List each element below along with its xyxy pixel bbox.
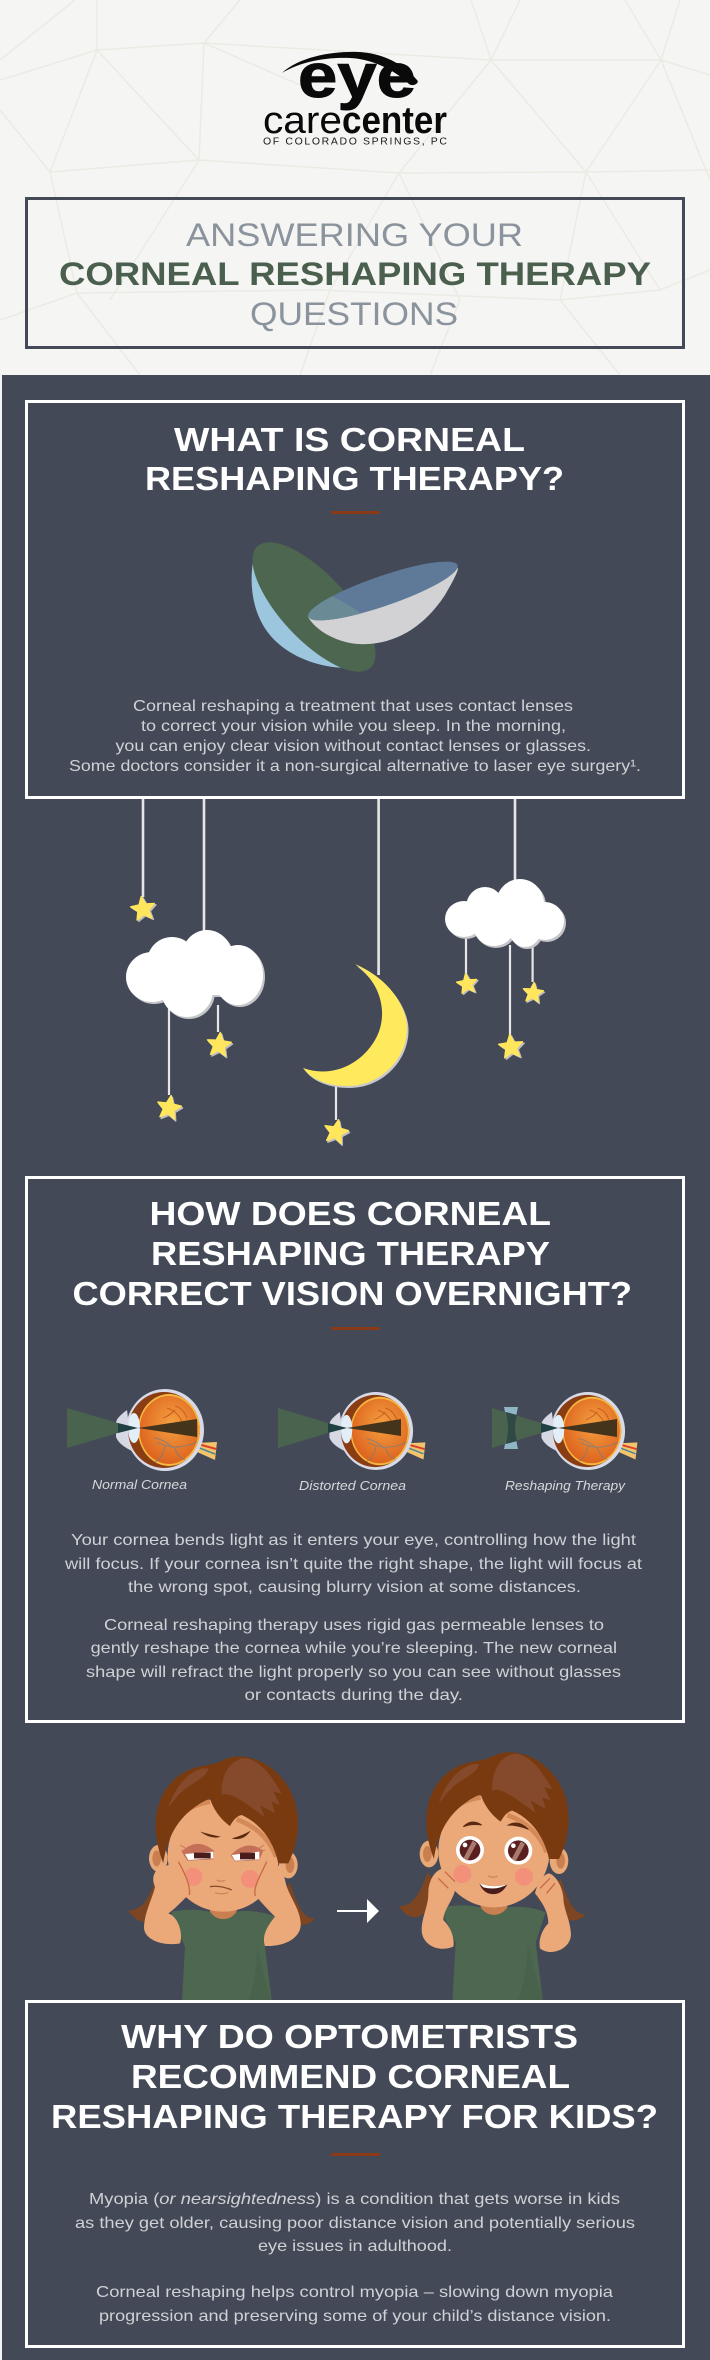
body text: progression and preserving some of your child’s distance vision. <box>99 2308 611 2325</box>
caption: Reshaping Therapy <box>505 1478 627 1493</box>
body text: the wrong spot, causing blurry vision at some distances. <box>128 1579 581 1596</box>
body text: Corneal reshaping a treatment that uses contact lenses <box>133 698 573 715</box>
star <box>522 981 545 1004</box>
body text: to correct your vision while you sleep. In the morning, <box>141 718 566 735</box>
body text <box>75 2191 635 2325</box>
heading: RECOMMEND CORNEAL <box>131 2058 570 2095</box>
body text: Corneal reshaping therapy uses rigid gas permeable lenses to <box>104 1617 604 1634</box>
body text: Corneal reshaping helps control myopia – slowing down myopia <box>96 2284 613 2301</box>
body text: or contacts during the day. <box>244 1687 463 1704</box>
panel: why do optometrists recommend corneal reshaping therapy for kids <box>26 2002 684 2346</box>
body text: will focus. If your cornea isn’t quite the right shape, the light will focus at <box>64 1556 643 1573</box>
panel: what is corneal reshaping therapy <box>26 402 684 798</box>
heading <box>145 421 564 497</box>
heading <box>72 1195 632 1312</box>
caption: Normal Cornea <box>92 1477 187 1492</box>
star <box>129 895 158 922</box>
body text: gently reshape the cornea while you’re sleeping. The new corneal <box>91 1640 617 1657</box>
heading: RESHAPING THERAPY <box>151 1235 550 1272</box>
title line: Corneal Reshaping Therapy: CORNEAL RESHAPING THERAPY <box>59 256 651 292</box>
moon <box>303 964 409 1088</box>
body text: shape will refract the light properly so you can see without glasses <box>86 1664 621 1681</box>
arrow <box>337 1899 379 1923</box>
logo: Eye Care Center: eye <box>298 42 416 111</box>
title panel <box>26 198 684 348</box>
logo: Eye Care Center: center <box>342 100 447 142</box>
star <box>155 1094 184 1122</box>
title line: Questions: QUESTIONS <box>250 296 458 332</box>
diagram: reshaping therapy eye with lens <box>492 1392 637 1470</box>
panel: how does corneal reshaping therapy correct vision overnight <box>26 1178 684 1722</box>
heading: WHAT IS CORNEAL <box>174 421 525 458</box>
body text: Myopia ( or nearsightedness ) is a condition that gets worse in kids <box>89 2191 620 2208</box>
heading: RESHAPING THERAPY FOR KIDS? <box>51 2098 658 2135</box>
body text: as they get older, causing poor distance vision and potentially serious <box>75 2215 635 2232</box>
body text: Some doctors consider it a non-surgical alternative to laser eye surgery¹. <box>69 758 641 775</box>
diagram: normal cornea eye <box>67 1389 217 1471</box>
body text: you can enjoy clear vision without contact lenses or glasses. <box>116 738 591 755</box>
icon: contact lenses <box>252 542 458 672</box>
star <box>456 972 480 995</box>
illustration: squinting child <box>128 1757 315 2007</box>
diagram: distorted cornea eye <box>278 1392 425 1470</box>
title line: Answering your: ANSWERING YOUR <box>186 217 523 253</box>
logo: Eye Care Center: care <box>263 100 342 142</box>
hanging night-sky mobile <box>126 799 566 1146</box>
star <box>498 1033 526 1060</box>
logo: Eye Care Center <box>263 42 447 148</box>
cloud: left <box>126 930 265 1019</box>
heading: WHY DO OPTOMETRISTS <box>121 2018 578 2055</box>
star <box>322 1117 352 1146</box>
illustration: happy child <box>399 1752 586 2002</box>
heading: HOW DOES CORNEAL <box>150 1195 551 1232</box>
caption: Distorted Cornea <box>299 1478 406 1493</box>
cloud: right <box>445 879 566 949</box>
body text <box>64 1532 643 1704</box>
heading: RESHAPING THERAPY? <box>145 460 564 497</box>
body text: eye issues in adulthood. <box>258 2238 452 2255</box>
body text <box>69 698 641 775</box>
body text: Your cornea bends light as it enters your eye, controlling how the light <box>71 1532 637 1549</box>
heading: CORRECT VISION OVERNIGHT? <box>72 1275 632 1312</box>
heading <box>51 2018 658 2135</box>
logo: Eye Care Center: OF COLORADO SPRINGS, PC <box>263 136 447 148</box>
star <box>206 1031 234 1058</box>
